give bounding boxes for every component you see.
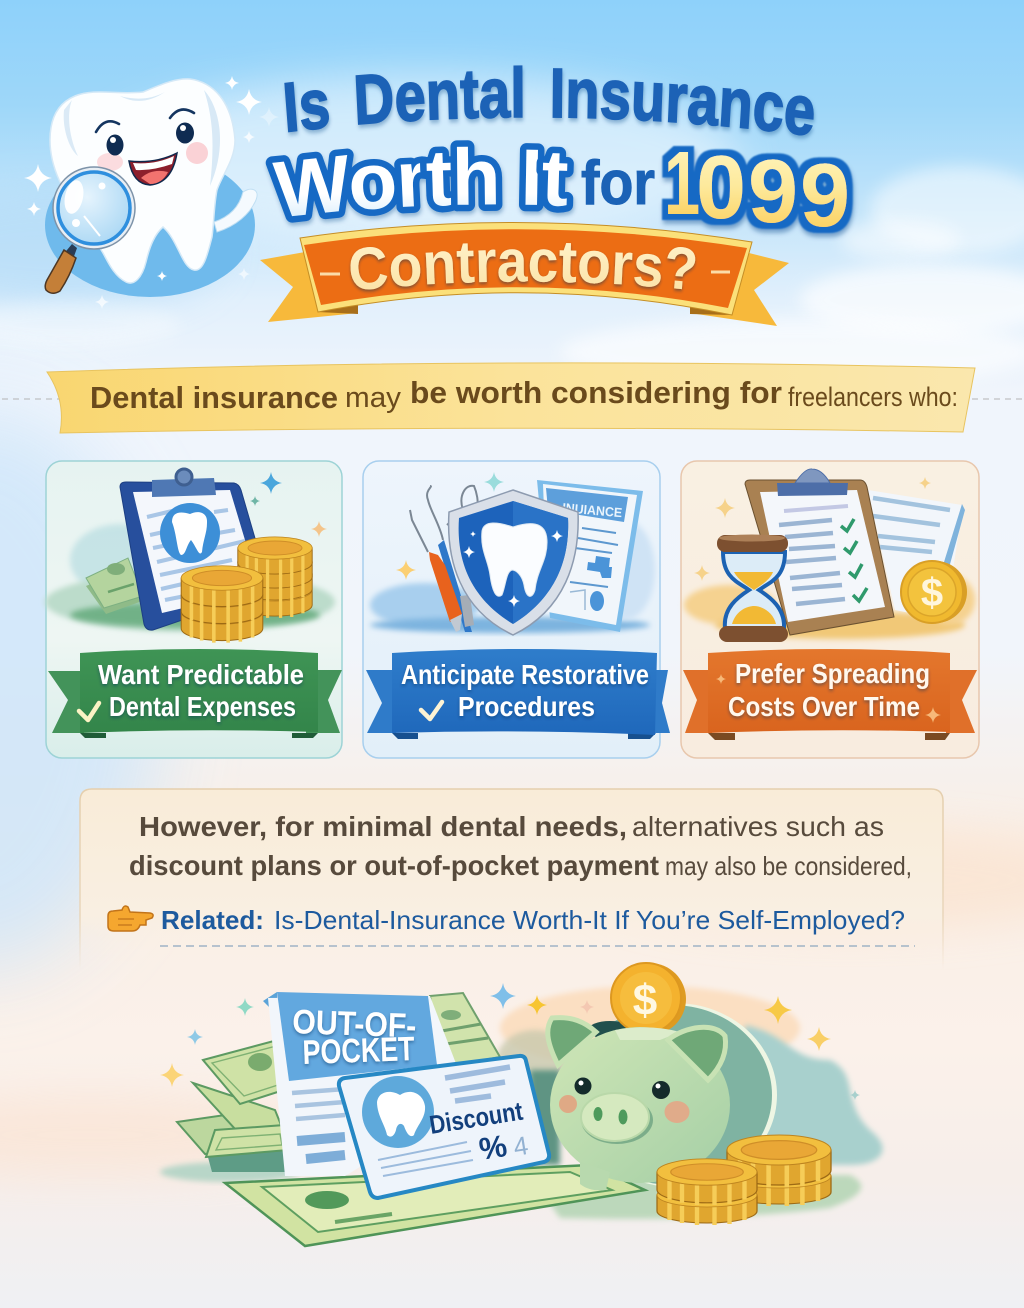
title line 2: Worth It: Worth It bbox=[264, 140, 578, 228]
ribbon text: Anticipate Restorative bbox=[401, 659, 649, 690]
icon: cash stacks bbox=[177, 993, 500, 1172]
panel: anticipate restorative procedures bbox=[363, 461, 670, 758]
text: out-of-pocket: OUT-OF- bbox=[292, 1003, 417, 1045]
icon: sparkles bbox=[160, 983, 860, 1100]
icon: check mark bbox=[79, 703, 99, 720]
panel: want predictable dental expenses bbox=[45, 461, 342, 758]
subtitle text: may bbox=[345, 382, 401, 414]
text: out-of-pocket bbox=[292, 1003, 417, 1072]
icon: coin entering slot bbox=[611, 963, 686, 1035]
icon: magnifying glass bbox=[45, 167, 135, 293]
title ribbon: Contractors? bbox=[260, 222, 789, 326]
text: percent: % bbox=[477, 1128, 509, 1167]
icon: coin stacks bbox=[181, 537, 312, 643]
text: second line: may also be considered, bbox=[665, 851, 912, 881]
ribbon text bbox=[728, 658, 930, 722]
ribbon: blue bbox=[366, 649, 670, 739]
icon: dollar coin bbox=[901, 561, 967, 623]
subtitle text bbox=[90, 375, 958, 415]
background blobs bbox=[160, 986, 883, 1219]
text: second line: discount plans or out-of-pocket payment bbox=[129, 850, 659, 881]
ribbon: orange bbox=[683, 649, 977, 740]
background wash bbox=[684, 575, 975, 639]
panel: alternatives note bbox=[80, 789, 943, 970]
icon: dollar coin: $ bbox=[921, 571, 943, 615]
ribbon: green bbox=[48, 649, 342, 738]
icon: shield with tooth bbox=[449, 490, 578, 635]
icon: gold coin stacks bbox=[657, 1135, 831, 1225]
icon: out-of-pocket document bbox=[263, 992, 470, 1176]
ribbon text bbox=[98, 659, 304, 722]
subtitle text: freelancers who: bbox=[788, 382, 958, 412]
text: second line bbox=[129, 850, 912, 881]
ribbon text: Want Predictable bbox=[98, 659, 304, 690]
icon: back document bbox=[868, 490, 965, 620]
icon: hourglass bbox=[717, 534, 788, 642]
text: out-of-pocket: POCKET bbox=[302, 1030, 415, 1072]
icon: tooth body bbox=[50, 79, 235, 283]
icon: clipboard with tooth bbox=[120, 469, 270, 630]
text: discount: Discount bbox=[427, 1096, 525, 1140]
icon: sparkles bbox=[396, 472, 504, 580]
icon: waving arm bbox=[214, 189, 257, 232]
subtitle text: be worth considering for bbox=[410, 375, 782, 410]
text: digit: 4 bbox=[511, 1130, 530, 1162]
illustration: tooth mascot with magnifying glass bbox=[24, 76, 279, 309]
panel: prefer spreading costs over time bbox=[681, 461, 979, 758]
title ribbon: Contractors?: Contractors? bbox=[349, 243, 697, 294]
title word: for: for bbox=[581, 149, 655, 218]
title number: 1099: 1 bbox=[664, 133, 700, 234]
icon: clipboard with checklist bbox=[745, 469, 894, 635]
icon: discount card bbox=[339, 1056, 549, 1198]
ribbon text: Costs Over Time bbox=[728, 691, 920, 722]
icon: piggy bank bbox=[548, 963, 777, 1190]
subtitle banner bbox=[47, 363, 975, 433]
pig face bbox=[559, 1078, 690, 1144]
pig ears bbox=[548, 1018, 596, 1065]
icon: cash stack bbox=[86, 558, 145, 614]
icon: insurance document bbox=[537, 480, 643, 632]
title bbox=[260, 65, 856, 326]
subtitle text: Dental insurance bbox=[90, 380, 338, 415]
icon: coin entering slot: $ bbox=[633, 976, 657, 1025]
related link: Is-Dental-Insurance Worth-It If You’re Self-Employed? bbox=[274, 905, 905, 935]
icon: check mark bbox=[421, 702, 442, 719]
related link: Related: bbox=[161, 905, 264, 935]
icon: insurance document: INUIANCE bbox=[562, 500, 623, 520]
icon: dental tools bbox=[410, 486, 478, 632]
icon: pointing hand bbox=[108, 906, 153, 931]
ribbon text bbox=[401, 659, 649, 722]
text: first line: However, for minimal dental needs, bbox=[139, 811, 627, 842]
icon: ribbon sparkles bbox=[716, 674, 941, 723]
icon: sparkles bbox=[250, 472, 327, 537]
icon: mascot face bbox=[96, 109, 208, 185]
illustration: savings scene bbox=[160, 963, 883, 1246]
decorative dashes beside subtitle bbox=[2, 398, 1022, 400]
title line 1: Is Dental Insurance: Is Dental Insurance bbox=[284, 65, 816, 140]
icon: sparkles around mascot bbox=[24, 76, 279, 309]
ribbon text: Dental Expenses bbox=[109, 691, 296, 722]
ribbon text: Prefer Spreading bbox=[735, 658, 930, 689]
ribbon text: Procedures bbox=[458, 691, 595, 722]
icon: sparkles bbox=[694, 477, 931, 581]
title number: 1099: 099 bbox=[696, 138, 850, 246]
background wash bbox=[45, 524, 335, 632]
background wash bbox=[370, 520, 655, 633]
icon: big bill bbox=[225, 1165, 645, 1246]
text: first line: alternatives such as bbox=[632, 811, 884, 842]
text: first line bbox=[139, 811, 884, 842]
